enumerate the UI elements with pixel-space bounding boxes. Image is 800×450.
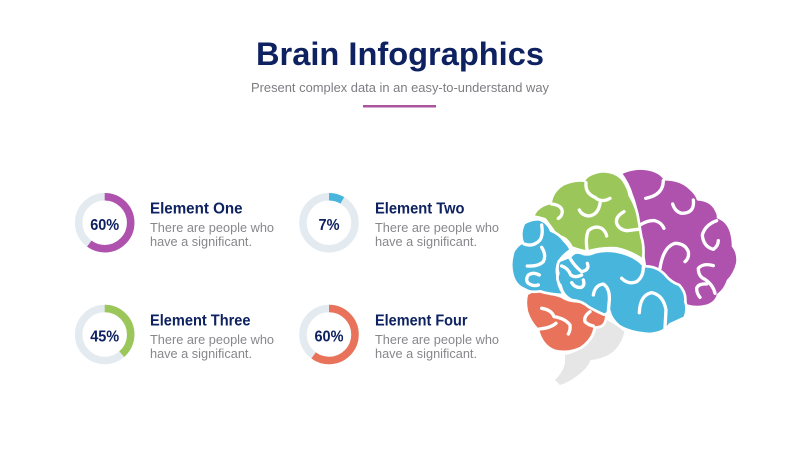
description: There are people who bbox=[375, 333, 499, 347]
description: There are people who bbox=[150, 333, 274, 347]
donut: 60% bbox=[303, 308, 355, 360]
heading: Element Three: Element Three bbox=[150, 312, 251, 330]
item: Element One bbox=[79, 197, 274, 249]
description: have a significant. bbox=[150, 347, 252, 361]
heading: Element One: Element One bbox=[150, 200, 243, 218]
donut: 60%: 60% bbox=[90, 217, 119, 234]
brain illustration bbox=[511, 169, 738, 385]
subtitle: Present complex data in an easy-to-understand way bbox=[251, 80, 549, 95]
lobe: green bbox=[533, 171, 644, 260]
donut: 60%: 60% bbox=[314, 328, 344, 346]
sulci bbox=[539, 308, 593, 334]
title: Brain Infographics bbox=[256, 36, 544, 72]
sulci bbox=[562, 258, 666, 328]
sulci bbox=[640, 181, 718, 297]
description: There are people who bbox=[150, 221, 274, 235]
item: Element Three bbox=[79, 308, 274, 361]
description: have a significant. bbox=[150, 235, 252, 249]
donut: 45% bbox=[79, 308, 131, 360]
donut: 45%: 45% bbox=[90, 328, 119, 346]
lobe: purple bbox=[621, 169, 738, 307]
description: have a significant. bbox=[375, 235, 477, 249]
lobe: blue left bbox=[511, 219, 571, 295]
lobe: blue centre bbox=[557, 251, 686, 334]
item: Element Two bbox=[303, 197, 499, 249]
description: There are people who bbox=[375, 221, 499, 235]
heading: Element Two: Element Two bbox=[375, 200, 464, 218]
donut: 7% bbox=[303, 197, 355, 249]
donut: 7%: 7% bbox=[318, 217, 340, 234]
item: Element Four bbox=[303, 308, 499, 361]
brain stem bbox=[555, 320, 624, 385]
sulci bbox=[524, 225, 545, 286]
sulci bbox=[552, 183, 638, 252]
donut: 60% bbox=[79, 197, 131, 249]
lobe: orange bbox=[526, 289, 606, 352]
title underline bbox=[363, 105, 436, 108]
heading: Element Four: Element Four bbox=[375, 312, 468, 330]
description: have a significant. bbox=[375, 347, 477, 361]
